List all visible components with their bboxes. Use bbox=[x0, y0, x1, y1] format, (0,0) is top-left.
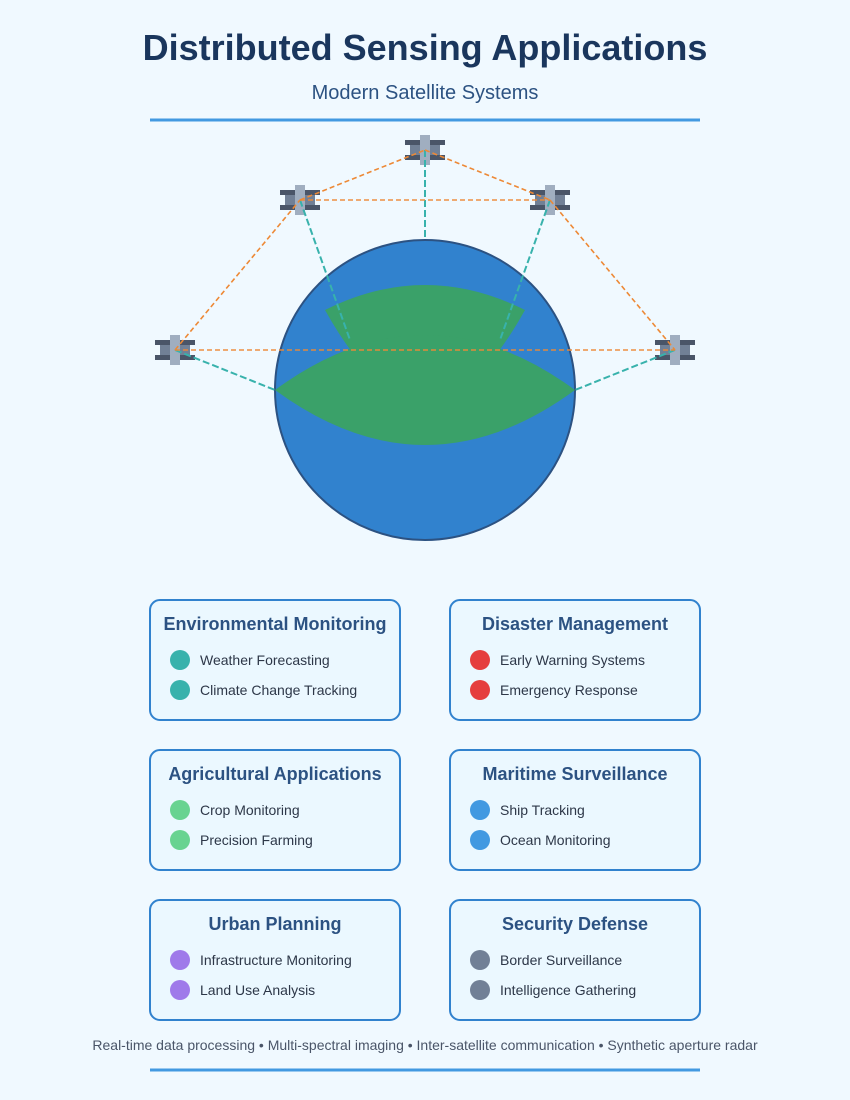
panel: maritime surveillance: Ocean Monitoring bbox=[500, 832, 611, 848]
diagram: satellite constellation over Earth bbox=[155, 135, 695, 540]
panel: security defense bbox=[450, 900, 700, 1020]
inter-satellite links bbox=[175, 150, 675, 350]
satellite: upper left bbox=[280, 185, 320, 215]
panel: agricultural applications bbox=[150, 750, 400, 870]
panel: security defense: Border Surveillance bbox=[500, 952, 622, 968]
panel: environmental monitoring: Weather Forecasting bbox=[200, 652, 330, 668]
footer note: Real-time data processing • Multi-spectral imaging • Inter-satellite communication • Synthetic aperture radar bbox=[92, 1037, 758, 1053]
title: Distributed Sensing Applications bbox=[143, 27, 707, 68]
panel: disaster management: Early Warning Systems bbox=[500, 652, 645, 668]
satellite: upper right bbox=[530, 185, 570, 215]
panel: security defense: Intelligence Gathering bbox=[500, 982, 636, 998]
panel: disaster management: Disaster Management bbox=[482, 614, 668, 634]
panel: environmental monitoring: Environmental Monitoring bbox=[164, 614, 386, 634]
panel: urban planning: Land Use Analysis bbox=[200, 982, 315, 998]
sensing beams bbox=[175, 150, 675, 390]
satellite: top bbox=[405, 135, 445, 165]
panel: urban planning: Urban Planning bbox=[208, 914, 342, 934]
coverage area: upper footprint bbox=[325, 285, 525, 400]
satellite: far right bbox=[655, 335, 695, 365]
coverage area: lower footprint bbox=[275, 335, 575, 445]
earth globe bbox=[275, 240, 575, 540]
panel: urban planning bbox=[150, 900, 400, 1020]
panel: maritime surveillance bbox=[450, 750, 700, 870]
panel: maritime surveillance: Maritime Surveillance bbox=[482, 764, 668, 784]
panel: security defense: Security Defense bbox=[502, 914, 648, 934]
panel: disaster management: Emergency Response bbox=[500, 682, 638, 698]
panel: agricultural applications: Agricultural Applications bbox=[168, 764, 382, 784]
panel: environmental monitoring: Climate Change Tracking bbox=[200, 682, 357, 698]
subtitle: Modern Satellite Systems bbox=[312, 82, 538, 104]
panel: agricultural applications: Crop Monitoring bbox=[200, 802, 300, 818]
panel: disaster management bbox=[450, 600, 700, 720]
panel: agricultural applications: Precision Farming bbox=[200, 832, 313, 848]
panel: environmental monitoring bbox=[150, 600, 400, 720]
panel: maritime surveillance: Ship Tracking bbox=[500, 802, 585, 818]
satellite: far left bbox=[155, 335, 195, 365]
panel: urban planning: Infrastructure Monitoring bbox=[200, 952, 352, 968]
